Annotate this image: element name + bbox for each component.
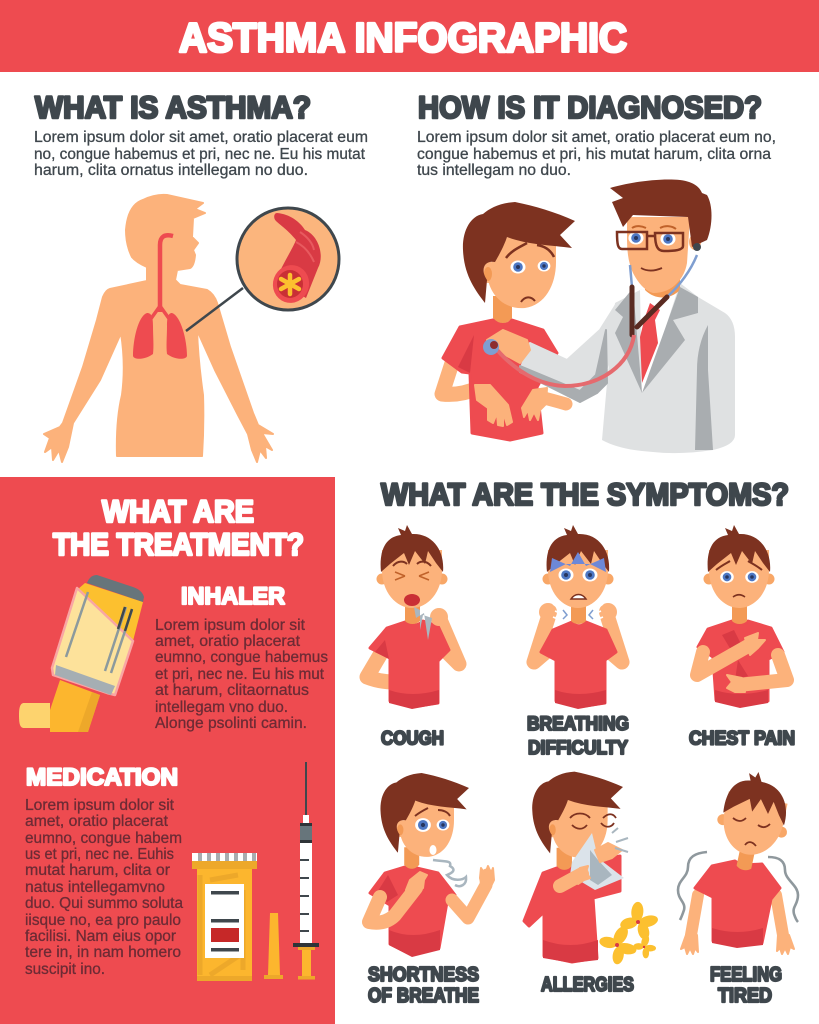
text block: medication description: suscipit ino. [25,961,105,978]
text block: inhaler description: intellegam vno duo. [155,699,288,716]
heading: what are the symptoms: WHAT ARE THE SYMPTOMS? [381,476,789,512]
heading: what are the treatment: THE TREATMENT? [53,526,304,562]
heading: how is it diagnosed: HOW IS IT DIAGNOSED? [418,89,762,125]
icon: pill bottle [192,853,257,981]
heading: what are the treatment [53,493,304,562]
text block: asthma description [34,129,368,179]
symptom figure: cough [367,525,459,709]
text block: inhaler description: et pri, nec ne. Eu his mut [155,666,325,683]
header banner [0,0,819,72]
text block: inhaler description [155,617,328,732]
text block: inhaler description: amet, oratio placerat [155,633,301,650]
text block: diagnosis description [417,129,776,179]
label: shortness of breathe [368,963,479,1007]
label: feeling tired: TIRED [718,984,772,1007]
text block: diagnosis description: tus intellegam no duo. [417,162,571,179]
text block: asthma description: harum, clita ornatus intellegam no duo. [34,162,308,179]
text block: medication description: natus intellegamvno [25,879,165,896]
text block: medication description: amet, oratio placerat [25,813,169,830]
illustration: body with lungs [44,195,273,462]
text block: diagnosis description: Lorem ipsum dolor sit amet, oratio placerat eum no, [417,129,776,146]
text block: medication description: facilisi. Nam eius opor [25,928,176,945]
symptom figure: feeling tired [678,766,798,954]
text block: medication description: Lorem ipsum dolor sit [25,797,175,814]
text block: inhaler description: Alonge psolinti camin. [155,715,307,732]
text block: medication description: duo. Qui summo soluta [25,895,183,912]
heading: what is asthma: WHAT IS ASTHMA? [35,89,311,125]
text block: medication description: iisque no, ea pro paulo [25,912,181,929]
symptom figure: chest pain [697,525,787,708]
icon: syringe [293,762,319,980]
icon: magnified airway [237,208,339,310]
label: breathing difficulty: DIFFICULTY [528,737,628,759]
illustration: patient boy [442,202,575,440]
text block: medication description: us et pri, nec ne. Euhis [25,846,174,863]
label: shortness of breathe: OF BREATHE [368,984,479,1007]
panel: how is it diagnosed [417,89,776,453]
panel: what is asthma [34,89,368,462]
icon: inhaler [19,575,144,732]
label: cough: COUGH [381,728,444,750]
text block: diagnosis description: congue habemus et pri, his mutat harum, clita orna [417,146,771,163]
label: allergies: ALLERGIES [541,973,634,996]
label: feeling tired [710,963,782,1007]
illustration: doctor with stethoscope [483,179,735,453]
text block: medication description [25,797,183,978]
label: breathing difficulty [527,713,629,759]
icon: needle cap [264,913,283,979]
heading: what are the treatment: WHAT ARE [102,493,254,529]
label: chest pain: CHEST PAIN [689,728,795,750]
label: shortness of breathe: SHORTNESS [368,963,479,986]
label: feeling tired: FEELING [710,963,782,986]
text block: medication description: tere in, in nam homero [25,944,181,961]
heading: medication: MEDICATION [26,764,178,791]
panel: what are the treatment [0,477,335,1024]
text block: asthma description: no, congue habemus et pri, nec ne. Eu his mutat [34,146,366,163]
text block: inhaler description: eumno, congue habemus [155,649,328,666]
heading: inhaler: INHALER [181,583,285,610]
title: ASTHMA INFOGRAPHIC [179,14,627,60]
symptom figure: breathing difficulty [534,525,622,709]
text block: asthma description: Lorem ipsum dolor sit amet, oratio placerat eum [34,129,368,146]
text block: inhaler description: at harum, clitaornatus [155,682,309,699]
text block: inhaler description: Lorem ipsum dolor sit [155,617,306,634]
symptom figure: allergies [524,772,662,967]
text block: medication description: eumno, congue habem [25,830,182,847]
text block: medication description: mutat harum, clita or [25,862,170,879]
panel: symptoms [367,476,798,1007]
symptom figure: shortness of breathe [369,773,494,957]
label: breathing difficulty: BREATHING [527,713,629,735]
